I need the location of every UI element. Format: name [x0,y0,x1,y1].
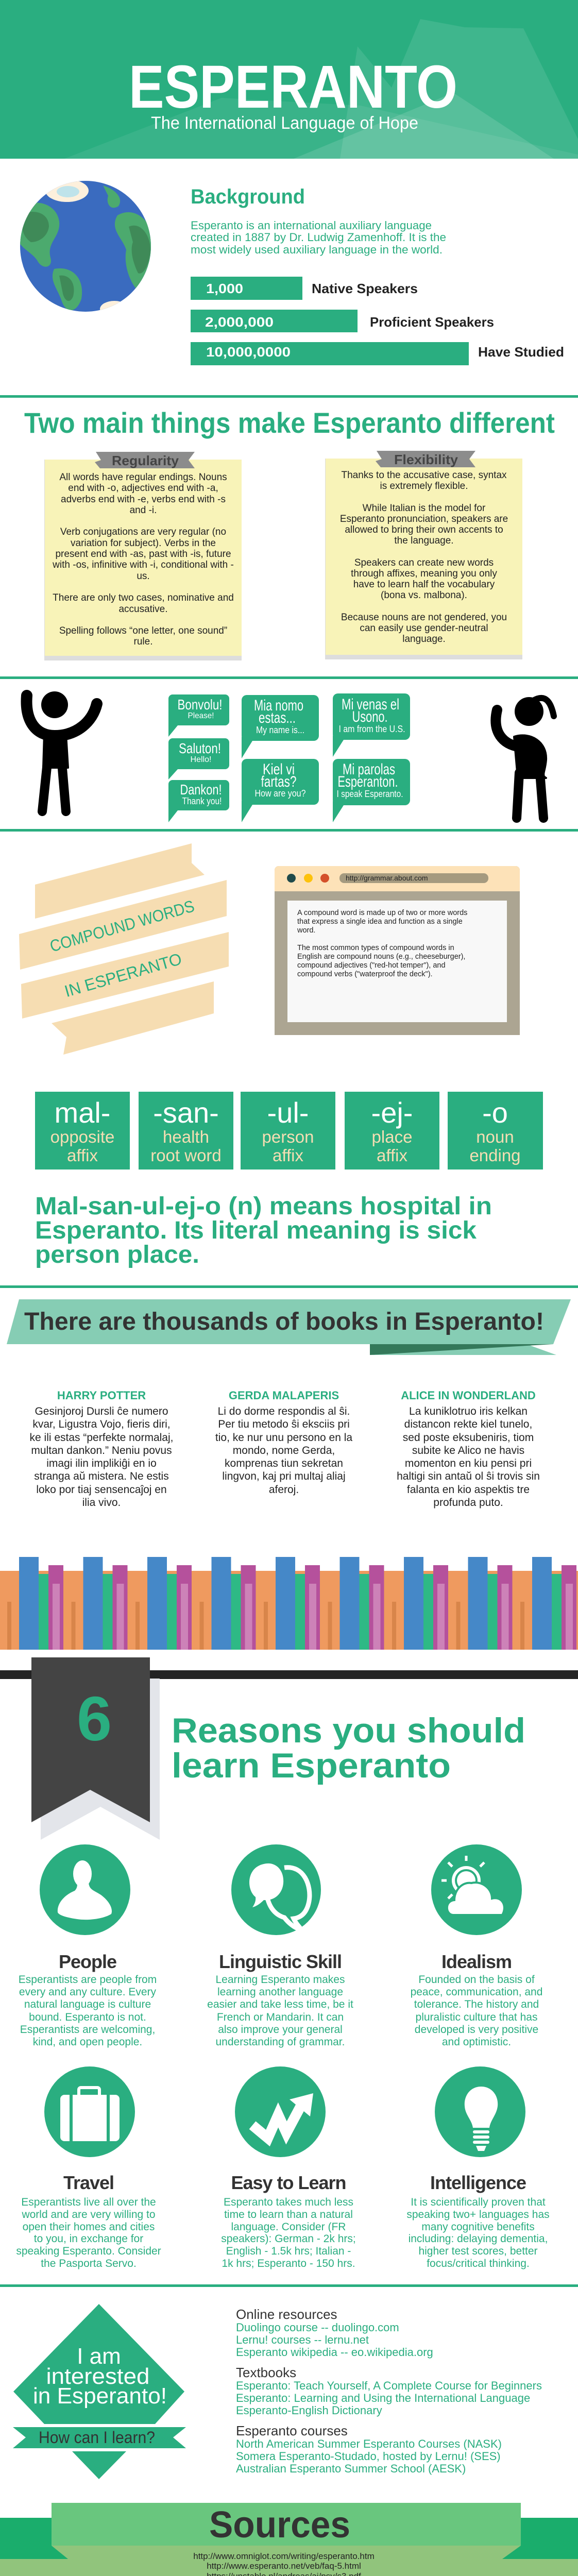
icon: speech bubbles [231,1844,321,1935]
background paragraph: Esperanto is an international auxiliary language [191,219,432,232]
header banner [0,0,578,159]
text: mal-san-ul-ej-o meaning: Mal-san-ul-ej-o (n) means hospital in [35,1193,492,1220]
text: flexibility points: the language. [394,535,454,546]
text: regularity rules: present end with -as, past with -is, future [55,549,231,560]
heading: background: Background [191,185,305,208]
affix boxes: -ej- [371,1096,413,1129]
reason: intelligence: focus/critical thinking. [427,2258,530,2269]
icon: suitcase [44,2066,135,2157]
affix boxes: -san- [153,1096,219,1129]
text: flexibility points: can easily use gender-neutral [360,623,488,634]
reason: people: every and any culture. Every [19,1986,156,1998]
definition text: English are compound nouns (e.g., cheeseburger), [297,953,465,961]
conversation scene: Mi parolas [343,761,395,778]
subtitle: The International Language of Hope [151,113,418,133]
reason: linguistic skill: easier and take less time, be it [207,1998,353,2010]
definition text: word. [297,926,315,935]
icon: man figure [27,691,97,811]
resources list: Esperanto wikipedia -- eo.wikipedia.org [236,2346,433,2359]
resources list: Esperanto-English Dictionary [236,2404,382,2417]
reason: intelligence: including: delaying dementia, [409,2233,548,2245]
reason: travel: Esperantists live all over the [21,2196,156,2208]
resources list: Lernu! courses -- lernu.net [236,2333,369,2346]
conversation scene: Mia nomo [254,697,303,714]
book excerpt: alice in wonderland: profunda puto. [433,1497,503,1509]
ribbon: compound words in esperanto: COMPOUND WORDS [48,896,196,956]
background paragraph: created in 1887 by Dr. Ludwig Zamenhoff. It is the [191,231,446,244]
arrow: down [72,2451,126,2479]
reason: idealism: and optimistic. [442,2036,511,2048]
book excerpt: harry potter [30,1389,173,1509]
bookmark: 6 [31,1657,160,1840]
heading: reasons [172,1713,525,1785]
conversation scene: My name is... [256,725,304,735]
resources list: Textbooks [236,2365,296,2380]
book excerpt: alice in wonderland: momenton en kiu pensi pri [405,1458,532,1469]
affix boxes: -o [482,1096,508,1129]
conversation scene: Mi venas el [342,696,399,713]
url bar: http://grammar.about.com [346,874,428,882]
text: regularity rules: with -os, infinitive with -i, conditional with - [53,560,234,570]
text: flexibility points: Esperanto pronunciation, speakers are [340,514,508,524]
reason: linguistic skill: understanding of grammar. [215,2036,345,2048]
book excerpt: harry potter: ilia vivo. [82,1497,121,1509]
affix boxes: affix [273,1146,303,1165]
book excerpt: gerda malaperis: komprenas tiun sekretan [225,1458,343,1469]
reason: travel: open their homes and cities [23,2221,155,2233]
book excerpt: harry potter: HARRY POTTER [57,1389,146,1402]
conversation scene: How are you? [254,788,306,799]
book excerpt: alice in wonderland: haltigi sin antaŭ ol ŝi trovis sin [397,1470,540,1482]
reason: idealism: pluralistic culture that has [416,2011,537,2023]
tag: flexibility: Flexibility [394,452,458,467]
book excerpt: alice in wonderland: distancon rekte kiel tunelo, [404,1418,532,1430]
reason: people: People [59,1951,116,1972]
affix boxes: -ul- [267,1096,309,1129]
background paragraph [191,219,446,256]
affix boxes: health [163,1127,209,1146]
definition text: that express a single idea and function as a single [297,918,463,926]
book excerpt: gerda malaperis: aferoj. [269,1484,299,1496]
text: mal-san-ul-ej-o meaning [35,1193,492,1268]
reason: linguistic skill: Linguistic Skill [219,1951,342,1972]
book excerpt: harry potter: stranga aŭ mistera. Ne estis [34,1470,169,1482]
book excerpt: alice in wonderland: sed poste eksubeniris, tiom [403,1432,534,1444]
reason: easy to learn: Esperanto takes much less [224,2196,353,2208]
book excerpt: alice in wonderland: falanta en kio aspektis tre [407,1484,530,1496]
reason: intelligence [406,2172,550,2269]
affix boxes: place [372,1127,412,1146]
tag: flexibility [376,451,475,467]
resources list: Esperanto courses [236,2423,348,2438]
bookmark: 6: 6 [77,1684,112,1754]
speech bubbles [168,693,410,822]
reason: linguistic skill [207,1951,353,2048]
definition text: The most common types of compound words in [297,944,454,952]
text: flexibility points: have to learn half the vocabulary [353,579,495,590]
text: mal-san-ul-ej-o meaning: Esperanto. Its literal meaning is sick [35,1217,477,1244]
conversation scene: fartas? [261,773,297,790]
reason: idealism: developed is very positive [415,2024,538,2036]
icon: rising arrow [235,2066,326,2157]
affix boxes: affix [67,1146,98,1165]
book excerpt: alice in wonderland [397,1389,540,1509]
affix boxes: affix [377,1146,407,1165]
resources list: North American Summer Esperanto Courses (NASK) [236,2437,502,2450]
text: flexibility points: While Italian is the model for [363,503,485,514]
panel: flexibility note [325,451,522,659]
panel: regularity note [44,452,242,660]
text: regularity rules: us. [137,571,150,582]
badge: i am interested: in Esperanto! [33,2383,167,2409]
text: flexibility points: (bona vs. malbona). [381,590,467,601]
reason: linguistic skill: French or Mandarin. It can [217,2011,344,2023]
text: regularity rules: end with -o, adjectives end with -a, [68,483,218,494]
resources list: Duolingo course -- duolingo.com [236,2321,399,2334]
text: regularity rules: adverbs end with -e, verbs end with -s [61,494,226,505]
reason: travel: the Pasporta Servo. [41,2258,137,2269]
text: regularity rules: variation for subject). Verbs in the [71,538,216,549]
text: regularity rules: Verb conjugations are very regular (no [60,527,226,537]
reason: idealism: peace, communication, and [411,1986,542,1998]
reason: linguistic skill: Learning Esperanto makes [215,1974,345,1986]
conversation scene: Thank you! [182,796,222,806]
text: flexibility points: through affixes, meaning you only [351,568,497,579]
bar chart: speakers: 1,000 [206,281,243,296]
affix boxes: opposite [50,1127,114,1146]
affix boxes: noun [476,1127,514,1146]
reason: travel: world and are very willing to [22,2209,156,2221]
tag: regularity [95,452,195,468]
badge: i am interested [13,2304,186,2479]
conversation scene: Kiel vi [263,761,295,778]
conversation scene: I speak Esperanto. [337,789,403,799]
book excerpt: gerda malaperis: Li do dorme respondis al ŝi. [218,1405,350,1417]
sources section [0,2503,578,2576]
conversation scene: Saluton! [179,740,221,756]
reason: easy to learn: language. Consider (FR [231,2221,346,2233]
book excerpt: harry potter: loko por tiaj sensencaĵoj en [36,1484,167,1496]
reason: intelligence: Intelligence [430,2172,526,2193]
badge: i am interested: I am [77,2344,121,2369]
book excerpt: harry potter: kvar, Ligustra Vojo, fieris diri, [32,1418,171,1430]
conversation scene: Esperanton. [338,773,398,790]
affix: -san- [139,1092,233,1170]
banner: thousands of books: There are thousands of books in Esperanto! [24,1308,544,1335]
text: flexibility points: language. [402,634,446,645]
conversation scene [21,690,557,823]
icon: globe [20,181,151,312]
reason: easy to learn: time to learn than a natural [224,2209,353,2221]
text: flexibility points: Thanks to the accusative case, syntax [341,470,507,481]
book excerpt: alice in wonderland: La kuniklotruo iris kelkan [409,1405,528,1417]
divider bar [0,1670,578,1679]
text: regularity rules [53,472,234,647]
affix boxes [35,1092,543,1170]
book excerpt: harry potter: multan dankon.” Neniu povus [31,1445,172,1456]
reason: easy to learn: 1k hrs; Esperanto - 150 hrs. [222,2258,355,2269]
book excerpt: harry potter: ke ili estas “perfekte normalaj, [30,1432,173,1444]
book excerpt: alice in wonderland: subite ke Alico ne havis [412,1445,524,1456]
resources list: Somera Esperanto-Studado, hosted by Lernu! (SES) [236,2450,501,2463]
reason: intelligence: It is scientifically proven that [411,2196,546,2208]
bar chart: speakers: Native Speakers [312,281,418,296]
reason: people: natural language is culture [24,1998,151,2010]
reason: linguistic skill: learning another language [217,1986,343,1998]
bar chart: speakers: Have Studied [478,344,564,360]
heading: reasons: learn Esperanto [172,1746,451,1785]
affix: mal- [35,1092,130,1170]
reason: intelligence: speaking two+ languages has [406,2209,550,2221]
icon: light bulb [435,2066,525,2157]
definition text: compound verbs ("waterproof the deck"). [297,970,433,978]
bar chart: speakers: 10,000,0000 [206,344,291,360]
banner: thousands of books [7,1299,571,1355]
bookshelf illustration [0,1557,578,1650]
reason: easy to learn: Easy to Learn [231,2172,346,2193]
reason: travel: speaking Esperanto. Consider [16,2245,161,2257]
definition text: compound adjectives ("red-hot temper"), and [297,961,446,970]
reason: idealism: Founded on the basis of [418,1974,535,1986]
affix: -o [448,1092,543,1170]
conversation scene: Bonvolu! [177,697,223,713]
conversation scene: Please! [188,711,214,720]
reason: idealism: Idealism [441,1951,512,1972]
text: flexibility points: is extremely flexible. [380,481,468,492]
reason: travel [16,2172,161,2269]
text: regularity rules: There are only two cases, nominative and [53,592,234,603]
text: flexibility points: allowed to bring their own accents to [345,524,503,535]
reason: people: Esperantists are welcoming, [20,2024,155,2036]
tag: regularity: Regularity [112,453,179,468]
text: regularity rules: accusative. [118,604,168,615]
book excerpt: gerda malaperis: Per tiu metodo ŝi eksciis pri [218,1418,350,1430]
reason: linguistic skill: also improve your general [218,2024,343,2036]
affix boxes: ending [469,1146,521,1165]
heading: background [191,185,446,256]
affix: -ul- [241,1092,335,1170]
resources list: Esperanto: Learning and Using the International Language [236,2392,530,2404]
reason: intelligence: higher test scores, better [418,2245,538,2257]
book excerpt: alice in wonderland: ALICE IN WONDERLAND [401,1389,536,1402]
bar chart: speakers: Proficient Speakers [370,314,494,330]
resources list [236,2307,542,2475]
book excerpt: harry potter: Gesinjoroj Dursli ĉe numero [35,1405,168,1417]
conversation scene: I am from the U.S. [339,724,405,734]
reason: idealism: tolerance. The history and [414,1998,539,2010]
ribbon: compound words in esperanto [19,843,229,1055]
affix boxes: person [262,1127,314,1146]
ribbon: how can i learn [13,2427,186,2448]
title: ESPERANTO [129,53,457,121]
text: regularity rules: Spelling follows “one letter, one sound” [59,625,227,636]
reason: people [19,1951,157,2048]
ribbon: compound words in esperanto: IN ESPERANTO [62,950,184,1001]
resources list: Australian Esperanto Summer School (AESK) [236,2462,466,2475]
background paragraph: most widely used auxiliary language in the world. [191,243,443,256]
reason: easy to learn [221,2172,356,2269]
icon: people [40,1844,130,1935]
text: mal-san-ul-ej-o meaning: person place. [35,1241,199,1268]
conversation scene: Dankon! [180,782,222,798]
text: flexibility points [340,470,508,645]
definition text [287,901,507,1022]
book excerpt: gerda malaperis: GERDA MALAPERIS [229,1389,339,1402]
affix: -ej- [345,1092,439,1170]
reason: travel: to you, in exchange for [34,2233,143,2245]
resources list: Esperanto: Teach Yourself, A Complete Course for Beginners [236,2379,542,2392]
source urls [193,2551,375,2576]
book excerpt: harry potter: imagi ilin implikiĝi en io [46,1458,157,1469]
book excerpt: gerda malaperis: mondo, nome Gerda, [233,1445,335,1456]
bar chart: speakers: 2,000,000 [205,314,274,330]
conversation scene: estas... [259,709,296,726]
conversation scene: Hello! [191,755,211,764]
reason: easy to learn: speakers): German - 2k hrs; [221,2233,356,2245]
book excerpt: gerda malaperis: lingvon, kaj pri multaj aliaj [222,1470,346,1482]
reason: travel: Travel [63,2172,114,2193]
affix boxes: root word [150,1146,222,1165]
affix boxes: mal- [55,1096,110,1129]
text: regularity rules: All words have regular endings. Nouns [59,472,227,483]
book excerpt: gerda malaperis [215,1389,352,1496]
reason: easy to learn: English - 1.5k hrs; Italian - [226,2245,351,2257]
text: regularity rules: rule. [134,636,152,647]
reason: people: bound. Esperanto is not. [29,2011,146,2023]
reason: idealism [411,1951,542,2048]
source urls: http://www.esperanto.net/veb/faq-5.html [207,2561,361,2571]
badge: i am interested: How can I learn? [39,2428,155,2447]
icon: sun and cloud [431,1844,522,1935]
reason: intelligence: many cognitive benefits [421,2221,535,2233]
bar chart: speakers [191,277,564,365]
text: flexibility points: Speakers can create new words [354,557,494,568]
browser window: compound word definition [275,866,520,1035]
url bar [339,873,488,883]
badge: i am interested: interested [46,2364,149,2389]
book excerpt: gerda malaperis: tio, ke nur unu persono en la [215,1432,352,1444]
resources list: Online resources [236,2307,337,2322]
conversation scene: Usono. [352,708,387,725]
icon: woman figure [496,697,554,818]
source urls: http://www.omniglot.com/writing/esperanto.htm [193,2551,375,2561]
definition text: A compound word is made up of two or more words [297,909,467,917]
heading: sources: Sources [209,2504,350,2546]
reason: people: kind, and open people. [33,2036,142,2048]
text: regularity rules: and -i. [130,505,157,516]
text: flexibility points: Because nouns are not gendered, you [341,612,507,623]
reason: people: Esperantists are people from [19,1974,157,1986]
